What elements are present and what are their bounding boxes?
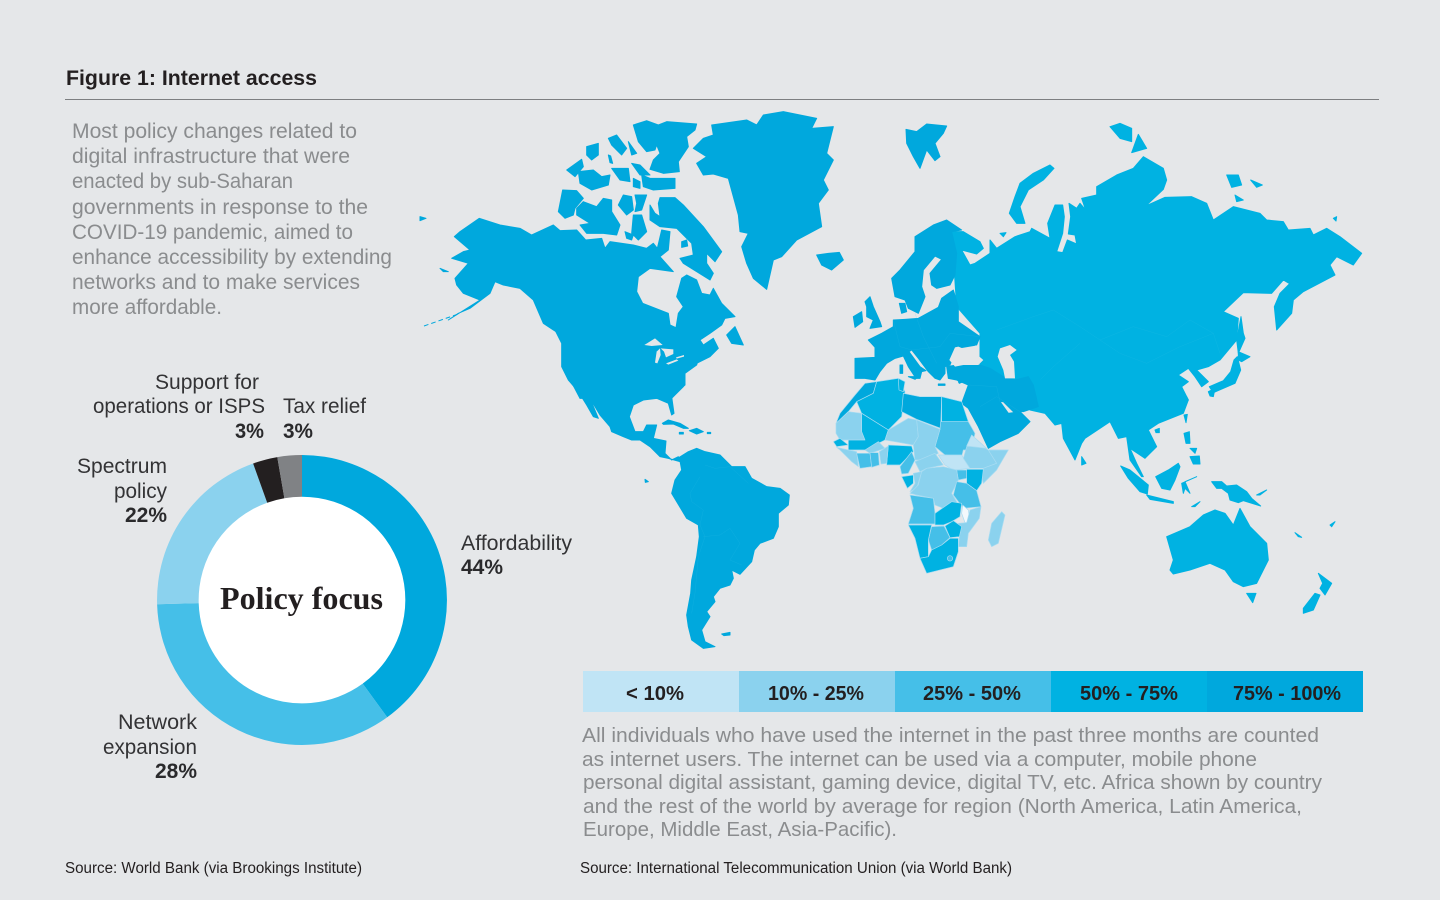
donut centre label: Policy focus bbox=[220, 580, 383, 616]
intro text block: governments in response to the bbox=[72, 196, 368, 219]
segment: tax relief bbox=[277, 455, 302, 498]
label: spectrum policy: Spectrum bbox=[77, 455, 167, 478]
intro text block: Most policy changes related to bbox=[72, 120, 357, 143]
legend: internet users colour scale bbox=[583, 671, 1363, 712]
label: network expansion bbox=[103, 711, 197, 783]
label: support for operations: Support for bbox=[155, 371, 259, 394]
intro text block: enacted by sub-Saharan bbox=[72, 170, 293, 193]
label: affordability: Affordability bbox=[461, 532, 573, 555]
map: Africa by country bbox=[833, 378, 1008, 573]
map note text block: All individuals who have used the internet in the past three months are counted bbox=[582, 724, 1319, 747]
label: support for operations bbox=[93, 371, 265, 443]
label: spectrum policy: 22% bbox=[125, 504, 167, 527]
map note text block: Europe, Middle East, Asia-Pacific). bbox=[583, 818, 897, 841]
label: network expansion: Network bbox=[118, 711, 197, 734]
intro text block: digital infrastructure that were bbox=[72, 145, 350, 168]
label: spectrum policy bbox=[77, 455, 167, 527]
intro text block: enhance accessibility by extending bbox=[72, 246, 392, 269]
map note text block: and the rest of the world by average for region (North America, Latin America, bbox=[583, 795, 1302, 818]
map note text block: personal digital assistant, gaming device, digital TV, etc. Africa shown by country bbox=[583, 771, 1323, 794]
map: Europe and Middle East bbox=[853, 290, 1038, 448]
intro text block: more affordable. bbox=[72, 296, 222, 319]
source: policy focus: Source: World Bank (via Brookings Institute) bbox=[65, 860, 362, 877]
legend: internet users colour scale: 75% - 100% bbox=[1233, 683, 1341, 705]
segment: affordability bbox=[302, 455, 447, 717]
label: network expansion: 28% bbox=[155, 760, 197, 783]
label: affordability bbox=[461, 532, 573, 579]
label: tax relief: Tax relief bbox=[283, 395, 366, 418]
legend: internet users colour scale: 10% - 25% bbox=[768, 683, 864, 705]
map: USA, Mexico and Central America bbox=[555, 330, 711, 462]
map note text block: as internet users. The internet can be used via a computer, mobile phone bbox=[582, 748, 1257, 771]
intro text block: COVID-19 pandemic, aimed to bbox=[72, 221, 353, 244]
intro text block bbox=[72, 120, 392, 319]
label: affordability: 44% bbox=[461, 556, 503, 579]
map: South America bbox=[645, 448, 789, 648]
segment: support for operations bbox=[253, 457, 284, 503]
donut chart: policy focus bbox=[157, 455, 447, 745]
segment: spectrum policy bbox=[157, 464, 267, 604]
title: Figure 1: Internet access bbox=[66, 67, 317, 90]
segment: network expansion bbox=[157, 603, 387, 745]
map: Russia and northern Asia bbox=[892, 123, 1362, 400]
legend: internet users colour scale: 25% - 50% bbox=[923, 683, 1021, 705]
label: tax relief bbox=[283, 395, 366, 443]
legend: internet users colour scale: 50% - 75% bbox=[1080, 683, 1178, 705]
label: support for operations: operations or ISPS bbox=[93, 395, 265, 418]
map note text block bbox=[582, 724, 1323, 841]
world map bbox=[420, 112, 1362, 648]
source: map: Source: International Telecommunication Union (via World Bank) bbox=[580, 860, 1012, 877]
map: North America and Arctic bbox=[420, 112, 843, 398]
label: support for operations: 3% bbox=[235, 420, 264, 443]
label: spectrum policy: policy bbox=[114, 480, 167, 503]
legend: internet users colour scale: < 10% bbox=[626, 683, 684, 705]
label: tax relief: 3% bbox=[283, 420, 313, 443]
label: network expansion: expansion bbox=[103, 736, 197, 759]
intro text block: networks and to make services bbox=[72, 271, 360, 294]
map: South Asia, Southeast Asia and Oceania bbox=[1030, 380, 1335, 613]
